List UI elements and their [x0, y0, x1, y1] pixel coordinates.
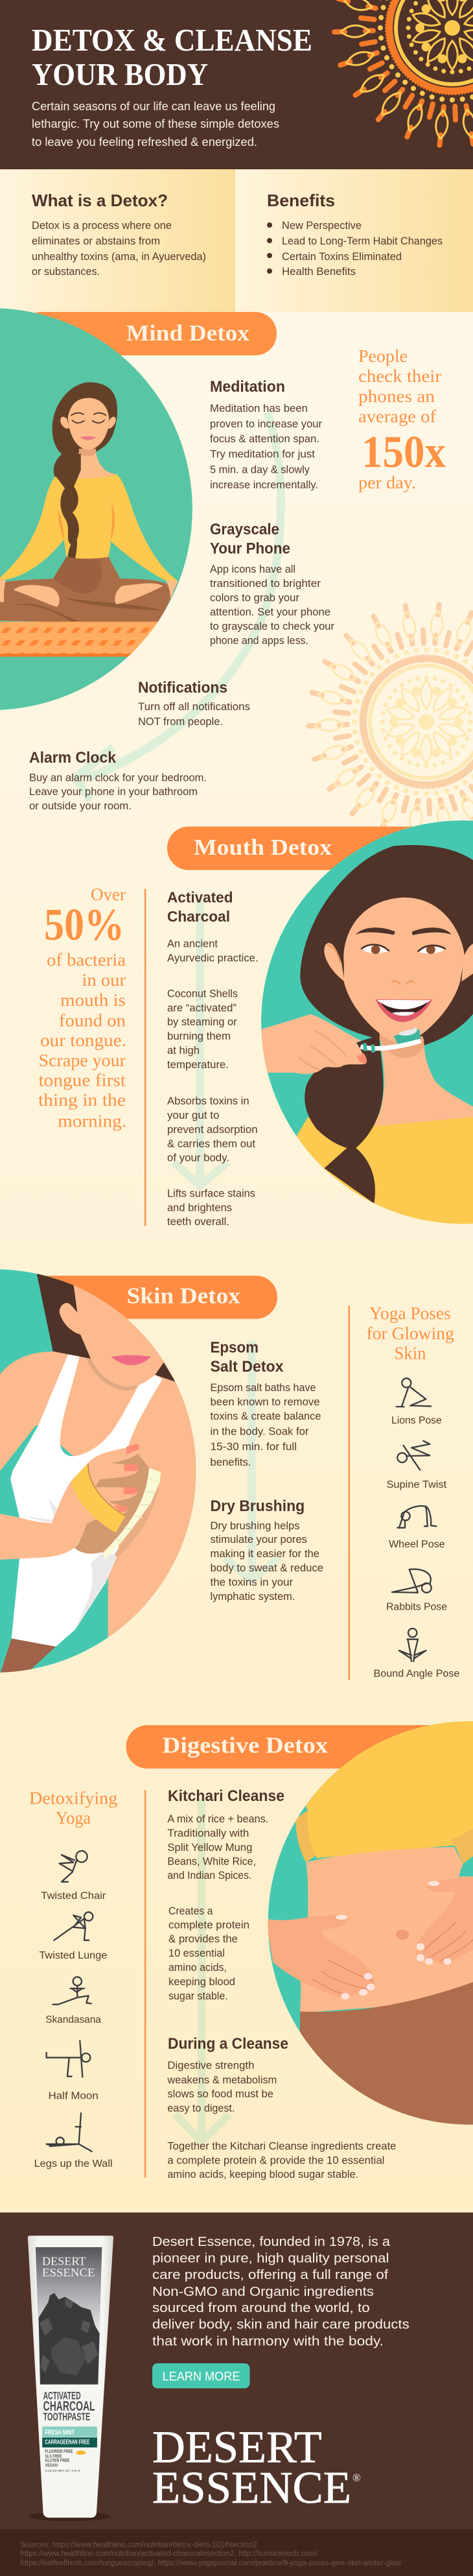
text: epsom salt detox: Salt Detox [210, 1358, 284, 1376]
text: during a cleanse: weakens & metabolism [167, 2075, 277, 2086]
text: kitchari cleanse: A mix of rice + beans. [167, 1813, 268, 1825]
label: legs up the wall: Legs up the Wall [34, 2158, 113, 2169]
intro text: lethargic. Try out some of these simple detoxes [32, 117, 279, 130]
text: dry brushing: making it easier for the [210, 1548, 319, 1560]
text: kitchari cleanse: Beans, White Rice, [167, 1856, 256, 1868]
shirt [297, 1115, 473, 1224]
braid [305, 1036, 384, 1148]
text: during a cleanse: During a Cleanse [168, 2035, 288, 2053]
text: during a cleanse: a complete protein & provide the 10 essential [167, 2155, 384, 2167]
strap [71, 1464, 126, 1532]
tube text: SLS FREE [45, 2454, 62, 2459]
text: grayscale your phone: to grayscale to check your [210, 621, 334, 632]
lips [111, 1355, 151, 1365]
button: learn more: LEARN MORE [162, 2370, 240, 2384]
stat: phone checks: average of [358, 407, 436, 426]
panel: footer brand [0, 2213, 473, 2529]
list: benefits: Lead to Long-Term Habit Changes [282, 235, 443, 247]
text: dry brushing: stimulate your pores [210, 1534, 307, 1545]
text: grayscale your phone: Grayscale [210, 521, 279, 538]
brush shadow [115, 1484, 159, 1558]
text: meditation: 5 min. a day & slowly [210, 464, 310, 476]
text: grayscale your phone: phone and apps less. [210, 635, 308, 647]
label: bound angle pose: Bound Angle Pose [373, 1668, 460, 1680]
icon: wheel pose [397, 1506, 436, 1528]
left hand [266, 1914, 376, 1999]
heading: detoxifying yoga: Detoxifying [29, 1789, 117, 1808]
stat: bacteria: our tongue. [40, 1031, 126, 1050]
text: definition: eliminates or abstains from [32, 235, 160, 247]
yoga mat [0, 621, 158, 655]
tube text: DESERT [42, 2254, 86, 2267]
label: twisted lunge: Twisted Lunge [39, 1950, 107, 1961]
icon: twisted chair [60, 1851, 87, 1882]
heading: yoga poses for glowing skin: for Glowing [367, 1324, 454, 1343]
stat: phone checks: check their [358, 366, 441, 386]
text: during a cleanse [167, 2035, 396, 2180]
nails [336, 1881, 452, 1999]
right hand [417, 1875, 473, 1965]
text: epsom salt detox: been known to remove [210, 1396, 320, 1408]
stat: bacteria: thing in the [38, 1090, 126, 1110]
shoulders and arm [0, 1352, 196, 1638]
text: epsom salt detox: 15-30 min. for full [210, 1441, 297, 1453]
heading: yoga poses for glowing skin [367, 1304, 454, 1363]
stat: bacteria: Over [91, 885, 126, 904]
stat: bacteria: in our [82, 970, 126, 990]
stat: bacteria: Scrape your [39, 1051, 126, 1070]
text: activated charcoal [167, 888, 259, 1228]
icon: bound angle pose [399, 1628, 426, 1662]
pants [0, 557, 170, 632]
braid [56, 453, 81, 558]
text: meditation: Meditation [210, 378, 285, 396]
ears [60, 417, 116, 429]
text: grayscale your phone: Your Phone [210, 540, 290, 558]
product: toothpaste tube [28, 2236, 113, 2521]
text: kitchari cleanse: Split Yellow Mung [167, 1842, 252, 1854]
text: activated charcoal: are “activated” [167, 1002, 236, 1014]
face [343, 898, 465, 1044]
text: alarm clock: Alarm Clock [29, 749, 117, 767]
heading: detoxifying yoga [29, 1789, 117, 1828]
text: meditation: increase incrementally. [210, 479, 318, 491]
arrow: skin detox [225, 1341, 279, 1580]
brush edge [102, 1467, 160, 1555]
text: meditation: proven to increase your [210, 418, 322, 430]
text: meditation: focus & attention span. [210, 433, 319, 445]
logo: desert essence: DESERT [152, 2422, 322, 2472]
panel: header [0, 0, 473, 169]
text: brand description: Non-GMO and Organic ingredients [152, 2285, 374, 2299]
panel: what is a detox [0, 169, 235, 312]
text: notifications: NOT from people. [138, 716, 223, 728]
label: lions pose: Lions Pose [391, 1415, 442, 1426]
text: kitchari cleanse: complete protein [168, 1920, 249, 1931]
title: DETOX & CLEANSE [32, 22, 312, 58]
intro text: to leave you feeling refreshed & energized. [32, 135, 257, 149]
icon: legs up the wall [47, 2113, 92, 2151]
divider: yoga poses [349, 1306, 350, 1680]
panel: sources [0, 2529, 473, 2576]
text: kitchari cleanse: Traditionally with [167, 1828, 249, 1839]
text: brand description: sourced from around the world, to [152, 2301, 370, 2315]
text: grayscale your phone: App icons have all [210, 564, 295, 575]
text: alarm clock: Leave your phone in your bathroom [29, 786, 198, 798]
text: dry brushing: the toxins in your [210, 1577, 294, 1588]
text: notifications: Notifications [138, 679, 227, 697]
text: epsom salt detox [210, 1339, 321, 1468]
eyes [361, 945, 446, 953]
text: during a cleanse: slows so food must be [167, 2088, 273, 2100]
icon: lions pose [397, 1378, 431, 1407]
text: activated charcoal: prevent adsorption [167, 1124, 258, 1136]
arrow: digestive detox [175, 1799, 229, 2141]
text: dry brushing [210, 1497, 323, 1603]
text: definition: Detox is a process where one [32, 219, 172, 232]
icon: twisted lunge [54, 1912, 93, 1940]
heading: detoxifying yoga: Yoga [56, 1808, 91, 1828]
shirt [266, 1717, 473, 1858]
heading: what is a detox: What is a Detox? [32, 191, 168, 210]
hair sliver [155, 1363, 176, 1382]
text: brand description: pioneer in pure, high quality personal [152, 2252, 389, 2266]
text: activated charcoal: Ayurvedic practice. [167, 953, 259, 964]
text: during a cleanse: Together the Kitchari Cleanse ingredients create [167, 2140, 396, 2152]
text: grayscale your phone: attention. Set your phone [210, 606, 330, 618]
brush back [75, 1454, 149, 1554]
text: brand description: that work in harmony with the body. [152, 2335, 384, 2349]
belly [300, 1847, 473, 2013]
text: kitchari cleanse: Kitchari Cleanse [168, 1787, 284, 1805]
stat: bacteria: of bacteria [47, 950, 126, 970]
panel: sources: https://eatfeelfresh.com/tonguescraping/, https://www.yogajournal.com/practice/9-yoga-poses-give-skin-winter-glow [21, 2559, 402, 2567]
nose [392, 981, 414, 984]
tube text: CHARCOAL [43, 2399, 95, 2414]
text: notifications [138, 679, 250, 728]
lips [80, 436, 96, 440]
tube text: ESSENCE [42, 2266, 95, 2279]
text: brand description: Desert Essence, founded in 1978, is a [152, 2235, 391, 2249]
shorts [299, 1976, 473, 2140]
intro text: Certain seasons of our life can leave us feeling [32, 99, 275, 113]
text: grayscale your phone: transitioned to brighter [210, 578, 321, 590]
text: during a cleanse: easy to digest. [167, 2103, 235, 2114]
text: kitchari cleanse: sugar stable. [168, 1990, 228, 2002]
text: activated charcoal: Charcoal [167, 908, 230, 925]
logo: desert essence [152, 2422, 361, 2513]
arrow: mind detox curve [75, 412, 281, 800]
stat: bacteria [38, 885, 126, 1131]
tube text [42, 2254, 95, 2472]
text: kitchari cleanse: Creates a [168, 1905, 213, 1917]
face [60, 1285, 165, 1387]
stat: phone checks [358, 346, 446, 492]
illustration: meditating woman [0, 308, 192, 710]
text: activated charcoal: temperature. [167, 1059, 229, 1071]
text: kitchari cleanse: and Indian Spices. [167, 1870, 251, 1881]
text: activated charcoal: Activated [167, 888, 233, 905]
text: activated charcoal: your gut to [167, 1110, 219, 1121]
navel [396, 1929, 409, 1940]
text: activated charcoal: teeth overall. [167, 1216, 229, 1228]
text: activated charcoal: An ancient [167, 938, 218, 950]
page background [0, 312, 473, 2213]
text: definition: unhealthy toxins (ama, in Ayuerveda) [32, 250, 206, 263]
text: activated charcoal: Absorbs toxins in [167, 1095, 249, 1107]
text: grayscale your phone: colors to grab your [210, 592, 300, 604]
pill: skin detox [19, 1276, 277, 1319]
text: notifications: Turn off all notifications [138, 701, 250, 713]
ears [324, 943, 345, 981]
closed eyes, brows [71, 413, 106, 423]
text: kitchari cleanse: & provides the [168, 1933, 238, 1945]
stat: bacteria: 50% [44, 900, 124, 950]
stat: bacteria: tongue first [39, 1070, 126, 1090]
heading: benefits: Benefits [267, 191, 335, 210]
text: definition: or substances. [32, 265, 100, 278]
label: rabbits pose: Rabbits Pose [386, 1602, 447, 1613]
sweater [0, 474, 178, 581]
text: alarm clock [29, 749, 207, 812]
text: meditation [210, 378, 322, 491]
title: YOUR BODY [32, 56, 208, 92]
panel: benefits [235, 169, 473, 312]
text: activated charcoal: of your body. [167, 1152, 229, 1164]
text: dry brushing: body to sweat & reduce [210, 1562, 323, 1574]
text: alarm clock: Buy an alarm clock for your bedroom. [29, 772, 207, 783]
text: activated charcoal: Coconut Shells [167, 988, 238, 1000]
intro text [32, 99, 279, 149]
list: benefits: Health Benefits [282, 265, 356, 278]
eyebrows [355, 927, 452, 935]
hand [259, 1014, 365, 1074]
panel: sources: Sources: https://www.healthline.com/nutrition/detox-diets-101#section2 [21, 2541, 257, 2549]
text: epsom salt detox: toxins & create balance [210, 1411, 321, 1422]
neck and shoulder [374, 1031, 473, 1127]
text: activated charcoal: by steaming or [167, 1016, 237, 1028]
text: definition [32, 219, 206, 278]
label: wheel pose: Wheel Pose [389, 1539, 445, 1550]
text: kitchari cleanse [167, 1787, 284, 2002]
tank shadows [26, 1498, 118, 1629]
text: dry brushing: lymphatic system. [210, 1591, 295, 1603]
label: skandasana: Skandasana [45, 2014, 101, 2025]
arrow: mouth detox [174, 900, 228, 1186]
text: dry brushing: Dry Brushing [210, 1497, 305, 1515]
text: kitchari cleanse: amino acids, [168, 1962, 227, 1974]
text: kitchari cleanse: 10 essential [168, 1948, 225, 1959]
stat: phone checks: per day. [358, 473, 416, 492]
button: learn more [152, 2363, 250, 2389]
text: activated charcoal: & carries them out [167, 1138, 255, 1150]
tube text: TOOTHPASTE [43, 2411, 90, 2423]
stat: phone checks: People [358, 346, 408, 366]
heading: yoga poses for glowing skin: Skin [394, 1344, 426, 1363]
shorts [0, 1638, 56, 1675]
illustration: belly with hands [266, 1717, 473, 2140]
tube text: 6.25 OZ NET WT. 176 G [45, 2469, 80, 2472]
text: brand description: deliver body, skin and hair care products [152, 2318, 410, 2332]
tube text: ACTIVATED [43, 2390, 81, 2402]
stat: bacteria: morning. [58, 1112, 126, 1131]
nails [114, 1444, 139, 1512]
tube text: FRESH MINT [45, 2429, 75, 2437]
icon: header sun mandala [332, 0, 473, 148]
hair [52, 382, 118, 477]
face [68, 398, 110, 449]
text: dry brushing: Dry brushing helps [210, 1520, 299, 1532]
text: grayscale your phone [210, 521, 334, 647]
label: twisted chair: Twisted Chair [41, 1890, 106, 1902]
pill: mouth detox: Mouth Detox [194, 835, 332, 860]
text: epsom salt detox: in the body. Soak for [210, 1426, 309, 1438]
text: alarm clock: or outside your room. [29, 800, 132, 812]
divider: mouth [144, 888, 146, 1226]
toothbrush [394, 1029, 421, 1045]
text: brand description [152, 2235, 410, 2349]
yoga list: glowing skin poses [373, 1378, 460, 1680]
text: activated charcoal: burning them [167, 1031, 231, 1042]
pill: mind detox: Mind Detox [126, 320, 250, 346]
forearm [0, 1462, 98, 1560]
tank top [10, 1354, 163, 1647]
icon: skandasana [53, 1977, 91, 2005]
icon: faded sun mandala [295, 591, 473, 852]
logo: desert essence: ESSENCE [152, 2463, 351, 2513]
heading: yoga poses for glowing skin: Yoga Poses [369, 1304, 451, 1323]
pill: skin detox: Skin Detox [127, 1283, 241, 1309]
text: activated charcoal: Lifts surface stains [167, 1188, 255, 1200]
illustration: dry brushing [0, 1269, 196, 1673]
text: meditation: Try meditation for just [210, 449, 315, 460]
stat: bacteria: mouth is [60, 990, 126, 1010]
yoga list: detoxifying poses [34, 1851, 113, 2169]
tube text: FLUORIDE FREE [45, 2450, 73, 2454]
list: benefits: New Perspective [282, 219, 362, 232]
tube text: CARRAGEENAN FREE [45, 2439, 90, 2446]
text: during a cleanse: amino acids, keeping blood sugar stable. [167, 2169, 358, 2180]
illustration: woman brushing teeth [259, 820, 473, 1236]
text: meditation: Meditation has been [210, 403, 308, 414]
text: epsom salt detox: benefits. [210, 1457, 251, 1468]
logo: desert essence: ® [352, 2472, 361, 2484]
label: half moon: Half Moon [48, 2090, 98, 2101]
stat: phone checks: 150x [362, 427, 446, 477]
hair [300, 845, 473, 1045]
list: benefits: Certain Toxins Eliminated [282, 250, 402, 263]
teal sliver [0, 1425, 38, 1518]
chin shadow [87, 1358, 139, 1390]
list: benefits [267, 219, 443, 278]
text: during a cleanse: Digestive strength [167, 2060, 254, 2071]
hair [37, 1273, 91, 1359]
hands and feet [0, 579, 178, 602]
pill: digestive detox [126, 1725, 454, 1769]
mouth [376, 999, 432, 1022]
pill: mind detox [19, 312, 277, 355]
icon: supine twist [397, 1441, 430, 1470]
text: activated charcoal: and brightens [167, 1202, 232, 1213]
text: activated charcoal: at high [167, 1045, 200, 1056]
panel: sources: https://www.healthline.com/nutrition/activated-charcoal#section2, http://humanetech.com/ [21, 2550, 317, 2558]
fingers [89, 1445, 139, 1516]
text: epsom salt detox: Epsom [210, 1339, 259, 1357]
bristles [102, 1468, 161, 1560]
neck and chest [78, 452, 116, 479]
divider: digestive [144, 1790, 146, 2178]
pill: digestive detox: Digestive Detox [162, 1733, 329, 1758]
stat: bacteria: found on [59, 1010, 126, 1030]
icon: half moon [47, 2041, 90, 2077]
tube text: VEGAN [45, 2464, 58, 2468]
text: brand description: care products, offering a full range of [152, 2268, 388, 2282]
title [32, 22, 312, 92]
tube text: GLUTEN FREE [45, 2459, 69, 2463]
pill: mouth detox [167, 826, 454, 870]
icon: rabbits pose [392, 1569, 432, 1593]
text: kitchari cleanse: keeping blood [168, 1976, 235, 1988]
label: supine twist: Supine Twist [386, 1479, 447, 1490]
stat: phone checks: phones an [358, 387, 435, 406]
text: epsom salt detox: Epsom salt baths have [210, 1382, 316, 1394]
